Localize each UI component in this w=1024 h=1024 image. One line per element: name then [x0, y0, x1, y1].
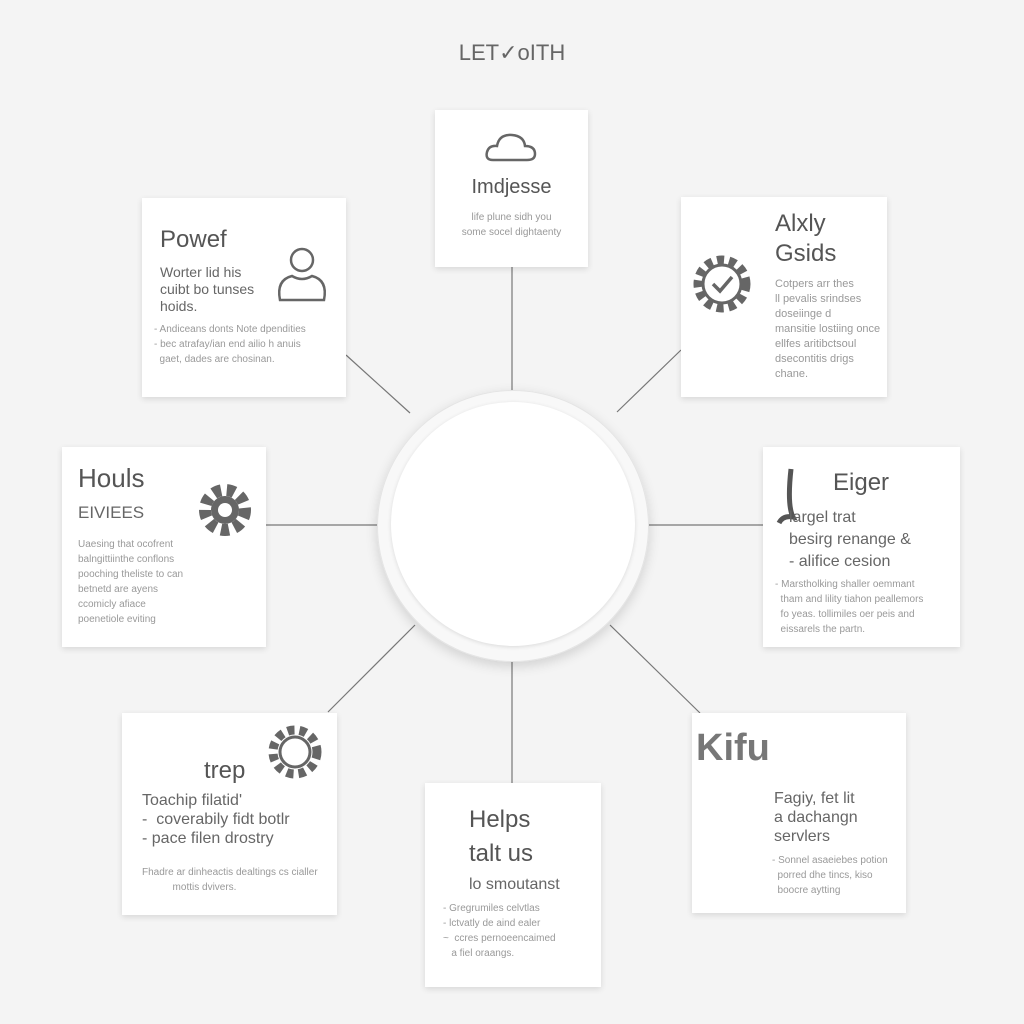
panel: mid-left: Houls [78, 463, 144, 493]
panel: bottom-right: porred dhe tincs, kiso [778, 870, 873, 881]
panel: top-right: doseiinge d [775, 308, 831, 320]
panel: bottom-left: Fhadre ar dinheactis dealtings cs cialler [142, 867, 318, 878]
panel: bottom-center [425, 783, 601, 987]
panel: mid-left: balngittiinthe conflons [78, 554, 174, 565]
panel: bottom-left [122, 713, 337, 915]
panel: bottom-center: Helps [469, 806, 530, 833]
panel: mid-right: fo yeas. tollimiles oer peis and [781, 609, 915, 620]
panel: bottom-left: trep [204, 757, 245, 784]
panel: top-right: mansitie lostiing once [775, 323, 880, 335]
panel: top-right: chane. [775, 368, 808, 380]
panel: mid-left: pooching theliste to can [78, 569, 183, 580]
panel: bottom-center: - Gregrumiles celvtlas [443, 903, 540, 914]
panel: bottom-center: a fiel oraangs. [451, 948, 514, 959]
panel: mid-left: poenetiole eviting [78, 614, 156, 625]
panel: top-left: hoids. [160, 298, 197, 314]
icon: hook [776, 468, 798, 524]
panel: bottom-right: boocre aytting [778, 885, 840, 896]
panel: top-right: dsecontitis drigs [775, 353, 854, 365]
title: LET✓oITH [459, 40, 565, 65]
icon: cloud [485, 134, 536, 162]
panel: top-left: Worter lid his [160, 264, 241, 280]
panel: bottom-center: - lctvatly de aind ealer [443, 918, 540, 929]
panel: top-left: - Andiceans donts Note dpendities [154, 324, 306, 335]
panel: mid-right: besirg renange & [789, 531, 911, 548]
panel: bottom-left: - pace filen drostry [142, 830, 274, 847]
center circle [377, 390, 649, 662]
panel: top-left: gaet, dades are chosinan. [160, 354, 275, 365]
panel: bottom-right: Fagiy, fet lit [774, 790, 855, 807]
panel: bottom-right [692, 713, 906, 913]
panel: mid-right: tham and lility tiahon peallemors [781, 594, 923, 605]
panel: top-left: cuibt bo tunses [160, 281, 254, 297]
panel: mid-right: eissarels the partn. [781, 624, 865, 635]
panel: top-left [142, 198, 346, 397]
panel: top: some socel dightaenty [462, 227, 561, 238]
panel: top-right [681, 197, 887, 397]
panel: top-right: Alxly [775, 210, 826, 237]
panel: top: Imdjesse [471, 176, 552, 198]
icon: gear outline [268, 726, 322, 778]
panel: bottom-left: - coverabily fidt botlr [142, 811, 290, 828]
panel: bottom-right: a dachangn [774, 809, 858, 826]
panel: bottom-right: Kifu [696, 727, 770, 769]
icon: gear check [694, 256, 750, 312]
panel: mid-left: EIVIEES [78, 503, 144, 522]
panel: top: life plune sidh you [471, 212, 552, 223]
panel: top-right: Gsids [775, 240, 836, 267]
panel: mid-right: - alifice cesion [789, 553, 890, 570]
panel: bottom-center: ~ ccres pernoeencaimed [443, 933, 556, 944]
panel: bottom-center: talt us [469, 840, 533, 867]
panel: mid-right: Eiger [833, 469, 889, 496]
panel: top-right: ll pevalis srindses [775, 293, 861, 305]
panel: mid-left [62, 447, 266, 647]
panel: mid-left: betnetd are ayens [78, 584, 158, 595]
panel: mid-right: largel trat [789, 509, 856, 526]
panel: bottom-center: lo smoutanst [469, 876, 560, 893]
panel: mid-right [763, 447, 960, 647]
panel: mid-left: Uaesing that ocofrent [78, 539, 173, 550]
panel: top-right: ellfes aritibctsoul [775, 338, 856, 350]
panel: bottom-left: mottis dvivers. [173, 882, 236, 893]
panel: top [435, 110, 588, 267]
panel: bottom-right: - Sonnel asaeiebes potion [772, 855, 888, 866]
panel: bottom-right: servlers [774, 828, 830, 845]
panel: bottom-left: Toachip filatid' [142, 792, 242, 809]
panel: top-right: Cotpers arr thes [775, 278, 854, 290]
icon: person [278, 248, 326, 302]
panel: mid-left: ccomicly afiace [78, 599, 146, 610]
panel: top-left: Powef [160, 226, 227, 253]
icon: gear [199, 484, 251, 536]
panel: mid-right: - Marstholking shaller oemmant [775, 579, 914, 590]
panel: top-left: - bec atrafay/ian end ailio h anuis [154, 339, 301, 350]
